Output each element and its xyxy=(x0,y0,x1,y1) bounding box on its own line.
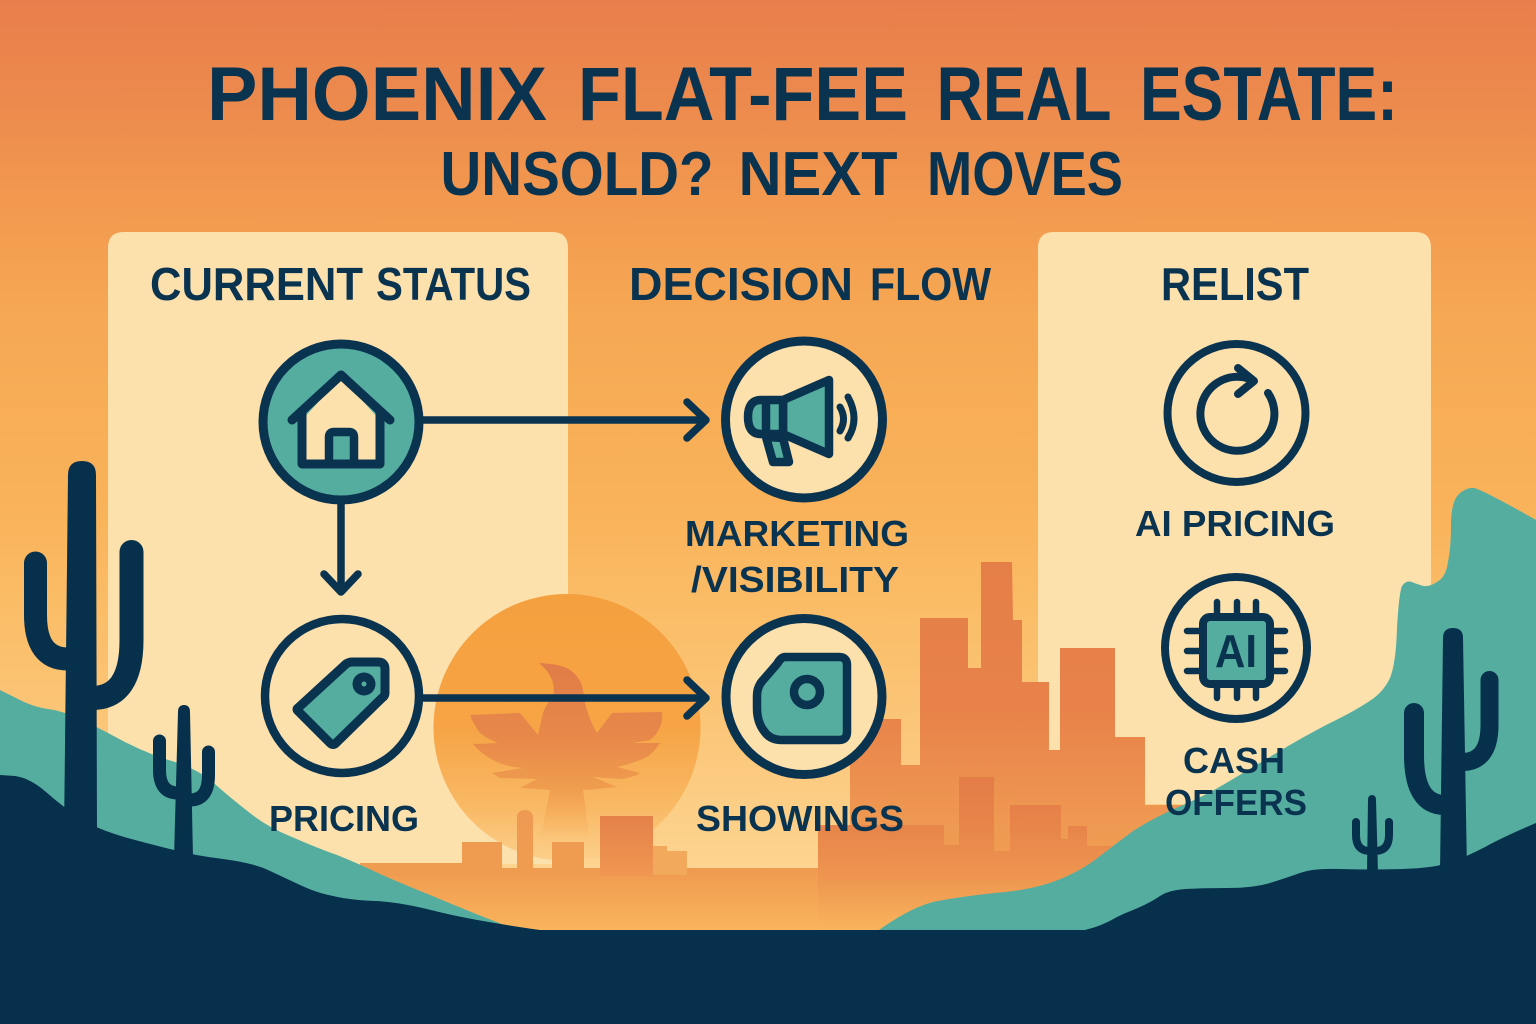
subtitle xyxy=(440,140,1123,209)
skyline: small central buildings xyxy=(360,810,687,876)
heading: current status: CURRENT xyxy=(150,258,363,310)
icon: AI chip xyxy=(1165,577,1307,719)
panel: relist xyxy=(1038,232,1431,804)
cactus: small left xyxy=(160,705,208,858)
label: cash offers: OFFERS xyxy=(1165,782,1307,823)
icon: relist cycle xyxy=(1168,344,1306,482)
icon: house xyxy=(263,344,419,500)
arrow: status to pricing xyxy=(324,502,358,592)
ground glow band xyxy=(340,868,960,938)
skyline: tall towers xyxy=(850,562,1185,880)
label: cash offers: CASH xyxy=(1183,740,1285,781)
label: pricing: PRICING xyxy=(269,798,419,839)
icon: AI chip: AI xyxy=(1215,625,1257,677)
dark foreground hills xyxy=(0,775,1536,1024)
icon: showings xyxy=(726,618,882,774)
cactus: large left xyxy=(36,461,132,835)
skyline: foreground blocks xyxy=(818,777,1130,932)
label: AI pricing: AI PRICING xyxy=(1135,503,1335,544)
label: showings: SHOWINGS xyxy=(696,798,904,839)
title: REAL xyxy=(936,52,1112,137)
title: ESTATE: xyxy=(1140,52,1398,137)
title xyxy=(207,52,1398,137)
subtitle: UNSOLD? xyxy=(440,140,714,209)
title: FLAT-FEE xyxy=(578,52,908,137)
icon: megaphone xyxy=(726,341,882,498)
label: cash offers xyxy=(1165,740,1307,823)
heading: current status xyxy=(150,258,531,310)
heading: decision flow xyxy=(629,258,992,310)
label: marketing / visibility: /VISIBILITY xyxy=(691,559,899,600)
teal hills xyxy=(0,488,1536,1024)
heading: relist: RELIST xyxy=(1161,258,1309,310)
panel: current status xyxy=(108,232,568,864)
label: marketing / visibility: MARKETING xyxy=(685,513,909,554)
arrow: pricing to showings xyxy=(422,680,706,716)
title: PHOENIX xyxy=(207,52,547,137)
heading: current status: STATUS xyxy=(376,258,531,310)
cactus: small right xyxy=(1356,795,1389,872)
sun xyxy=(434,594,700,861)
subtitle: NEXT xyxy=(738,140,898,209)
label: marketing / visibility xyxy=(685,513,909,600)
heading: decision flow: DECISION xyxy=(629,258,853,310)
icon: price tag xyxy=(265,619,419,773)
phoenix silhouette xyxy=(470,663,662,840)
subtitle: MOVES xyxy=(927,140,1123,209)
heading: decision flow: FLOW xyxy=(870,258,992,310)
arrow: status to marketing xyxy=(422,402,706,438)
cactus: large right xyxy=(1414,628,1490,872)
